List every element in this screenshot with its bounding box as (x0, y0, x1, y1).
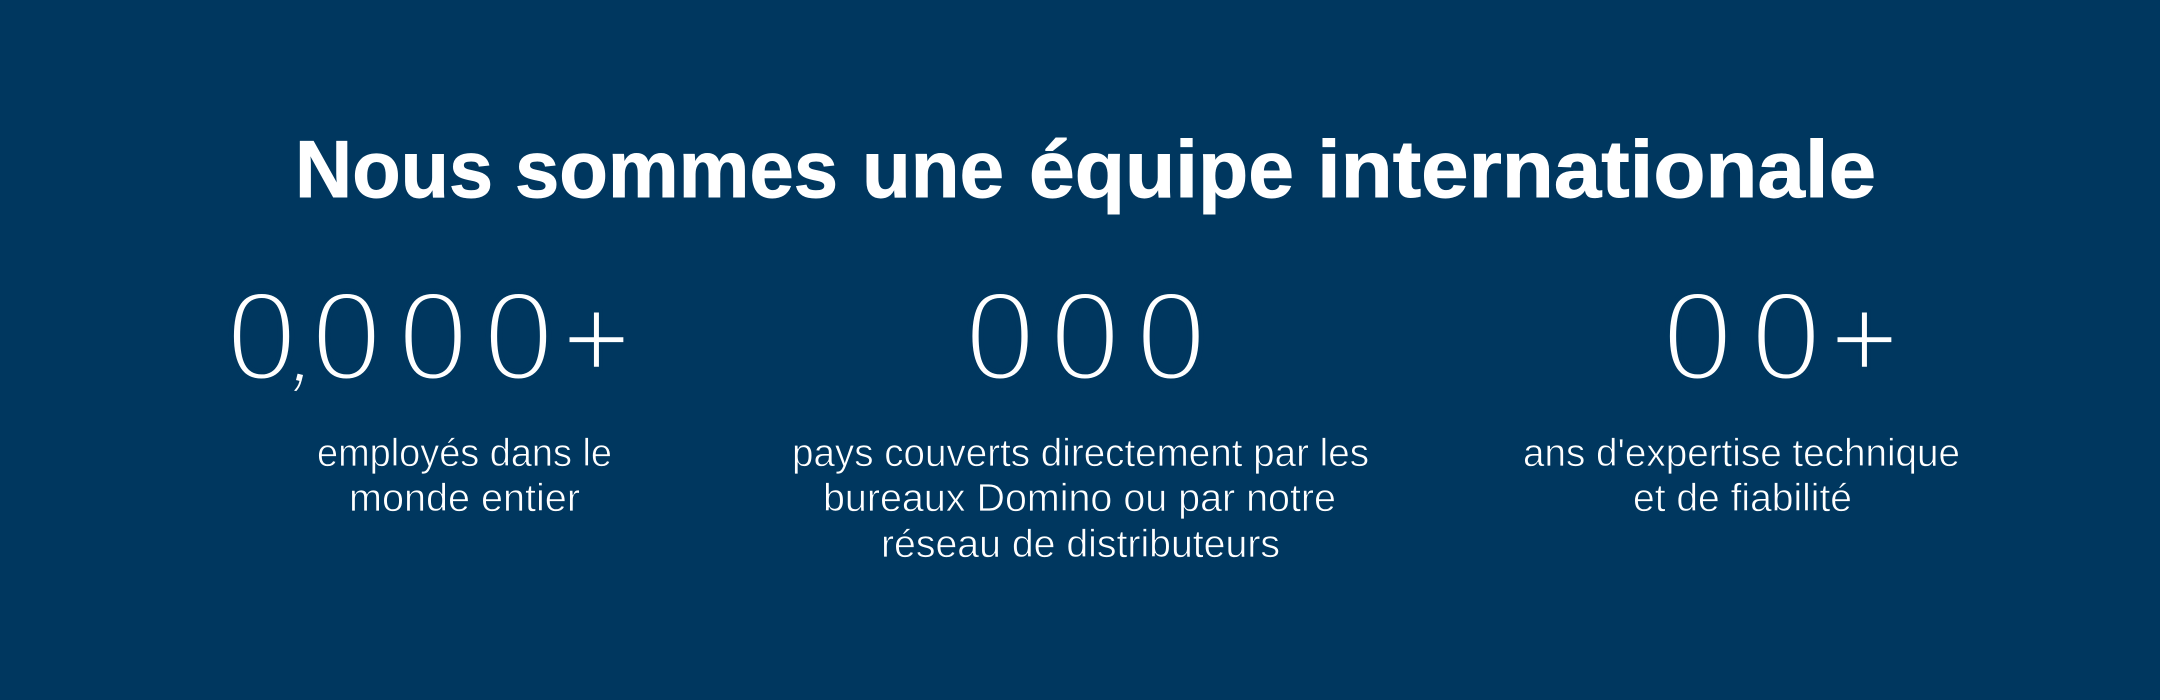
caption: employees (317, 432, 612, 520)
caption: countries: réseau de distributeurs (881, 523, 1280, 566)
title: internationale (1317, 125, 1876, 215)
stat: countries (792, 266, 1369, 566)
number: 00+: + (1830, 273, 1899, 405)
caption: employees: monde entier (349, 477, 580, 520)
caption: countries (792, 432, 1369, 566)
number: 0,000+: 0 (226, 266, 297, 407)
caption: years (1523, 432, 1960, 520)
caption: years: ans d'expertise technique (1523, 432, 1960, 475)
caption: countries: bureaux Domino ou par notre (823, 477, 1336, 520)
stat: employees (226, 266, 631, 520)
caption: employees: employés dans le (317, 432, 612, 475)
caption: years: et de fiabilité (1633, 477, 1852, 520)
stat: years (1523, 266, 1960, 520)
number: 0,000+: 000 (312, 266, 554, 407)
title: équipe (1029, 125, 1294, 215)
number: 0,000+: + (562, 273, 631, 405)
caption: countries: pays couverts directement par les (792, 432, 1369, 475)
title: une (862, 125, 1004, 215)
number: 0,000+: , (283, 305, 328, 402)
title (295, 125, 1876, 215)
number: 000: 000 (965, 266, 1206, 407)
title: Nous (295, 125, 493, 215)
title: sommes (515, 125, 838, 215)
number: 00+: 00 (1662, 266, 1821, 407)
